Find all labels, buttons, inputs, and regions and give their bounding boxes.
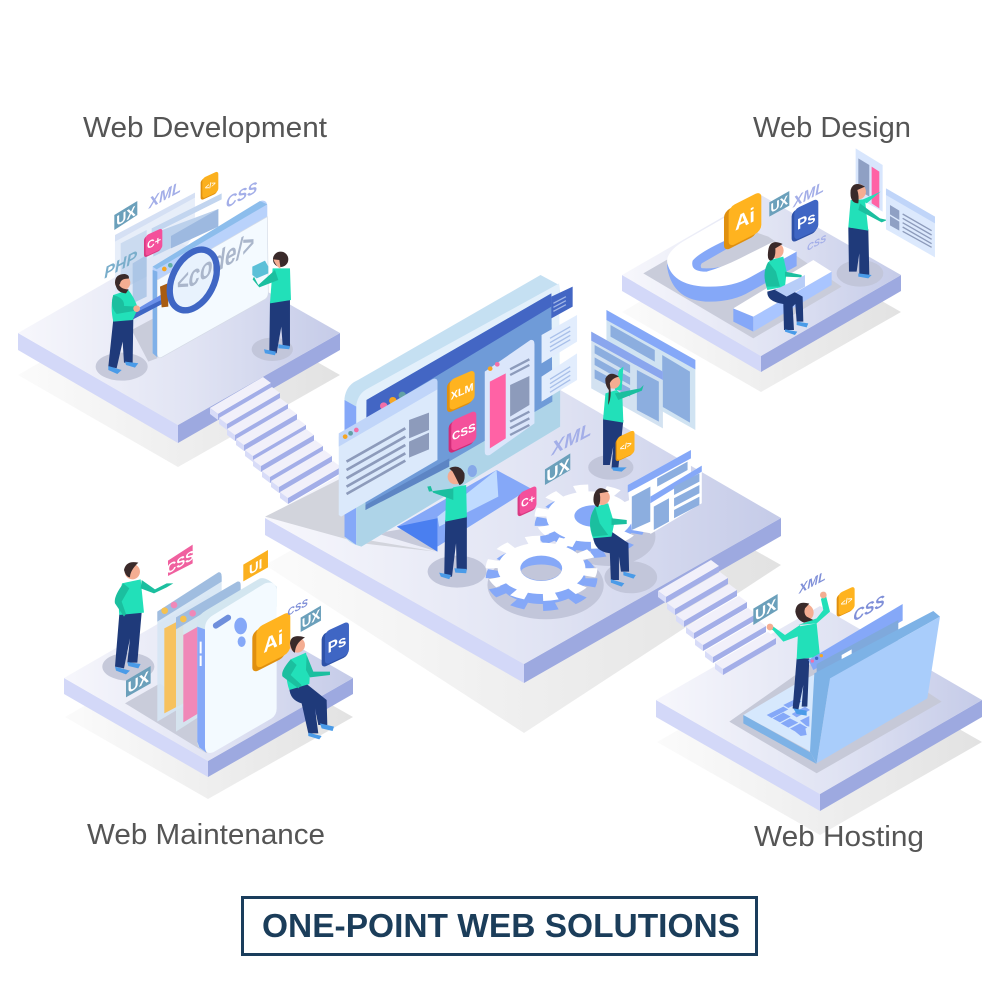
person: seated man — [282, 636, 334, 739]
tag: UI — [243, 550, 268, 581]
foreground text window — [339, 379, 437, 517]
back windows — [115, 193, 222, 327]
tag: UX: UX — [116, 203, 136, 230]
tag: UX: UX — [546, 455, 570, 486]
badge: code tag: </> — [841, 594, 853, 609]
window stack: upper right — [591, 310, 695, 430]
platform shadows — [18, 232, 982, 835]
small windows — [628, 450, 702, 534]
person: man with tablet — [252, 252, 293, 361]
scene: central monitor — [265, 275, 702, 619]
back phone screens — [157, 572, 241, 732]
laptop keyboard — [743, 673, 817, 764]
title: ONE-POINT WEB SOLUTIONS — [262, 907, 740, 944]
bench — [733, 260, 832, 332]
back gear — [543, 489, 637, 553]
phone — [197, 578, 277, 753]
badge: CSS: CSS — [452, 420, 476, 444]
badge: XLM: XLM — [451, 381, 474, 403]
badge: Ai — [252, 611, 290, 674]
person: woman at windows — [588, 367, 644, 480]
badge: Ai — [724, 191, 761, 252]
label: CSS: CSS — [287, 596, 309, 619]
badge: code tag — [837, 586, 855, 618]
platform: web design — [622, 195, 901, 372]
tall window — [485, 340, 534, 455]
badge: C+: C+ — [147, 234, 161, 252]
scene: web design — [643, 148, 935, 338]
label: CSS: CSS — [226, 178, 257, 212]
front gear — [494, 540, 589, 606]
person: seated woman on gear — [590, 488, 636, 587]
platform: web hosting — [656, 606, 982, 811]
stairs: lower right — [658, 560, 776, 675]
tag: UX: UX — [302, 607, 321, 632]
badge: C+: C+ — [521, 493, 535, 511]
person: bearded man — [96, 274, 148, 381]
monitor stand — [397, 470, 530, 552]
label: XML: XML — [148, 178, 181, 213]
tag: UX: UX — [128, 667, 149, 697]
person: man with raised arms — [767, 592, 830, 716]
scene: web development — [96, 171, 293, 381]
label: CSS: CSS — [853, 592, 885, 625]
tag: UI: UI — [249, 556, 262, 579]
label: XML: XML — [551, 419, 592, 461]
badge: CSS — [449, 410, 476, 454]
badge: Ps: Ps — [797, 208, 816, 234]
label: CSS: CSS — [807, 233, 827, 254]
tag: UX: UX — [755, 595, 776, 625]
laptop screen — [808, 604, 940, 763]
label: XML: XML — [792, 179, 824, 212]
browser panel with code — [153, 201, 268, 358]
tag: UX: UX — [771, 192, 788, 216]
person: man at monitor — [427, 467, 486, 588]
badge: C+ — [518, 485, 536, 517]
monitor body — [344, 275, 573, 547]
badge: Ai: Ai — [735, 203, 755, 236]
label: XML: XML — [798, 568, 826, 597]
heading: web hosting: Web Hosting — [754, 821, 924, 853]
badge: code tag — [616, 430, 635, 462]
magnifier lens — [160, 242, 226, 318]
badge: C+ — [144, 228, 162, 258]
title — [242, 898, 756, 954]
badge: code tag — [201, 171, 218, 201]
person: standing woman — [837, 184, 887, 287]
badge: Ai: Ai — [263, 625, 283, 658]
platform: web development — [18, 241, 340, 443]
side panels — [542, 315, 577, 402]
heading: web design: Web Design — [753, 112, 911, 144]
badge: XLM — [447, 369, 475, 414]
label: PHP: PHP — [104, 247, 138, 282]
platform: central — [265, 369, 781, 683]
gear shadows — [487, 507, 657, 619]
badge: Ps — [792, 198, 818, 243]
badge: code tag: </> — [620, 438, 632, 453]
person: seated woman with laptop — [765, 242, 808, 335]
U shape — [667, 217, 797, 302]
heading: web development: Web Development — [83, 112, 327, 144]
window with pink bar — [856, 148, 883, 212]
badge: Ps: Ps — [328, 631, 346, 657]
magnifier — [124, 242, 226, 323]
stairs: upper left — [210, 377, 341, 504]
badge: Ps — [322, 621, 349, 668]
code label: <code/> — [177, 226, 254, 301]
scene: web hosting — [729, 568, 942, 773]
platform: web maintenance — [64, 595, 353, 777]
badge: code tag: </> — [205, 179, 216, 192]
heading: web maintenance: Web Maintenance — [87, 819, 325, 851]
scene: web maintenance — [102, 545, 349, 753]
window with text lines — [886, 188, 935, 257]
tag: CSS: CSS — [167, 547, 194, 578]
person: standing man — [102, 562, 173, 681]
